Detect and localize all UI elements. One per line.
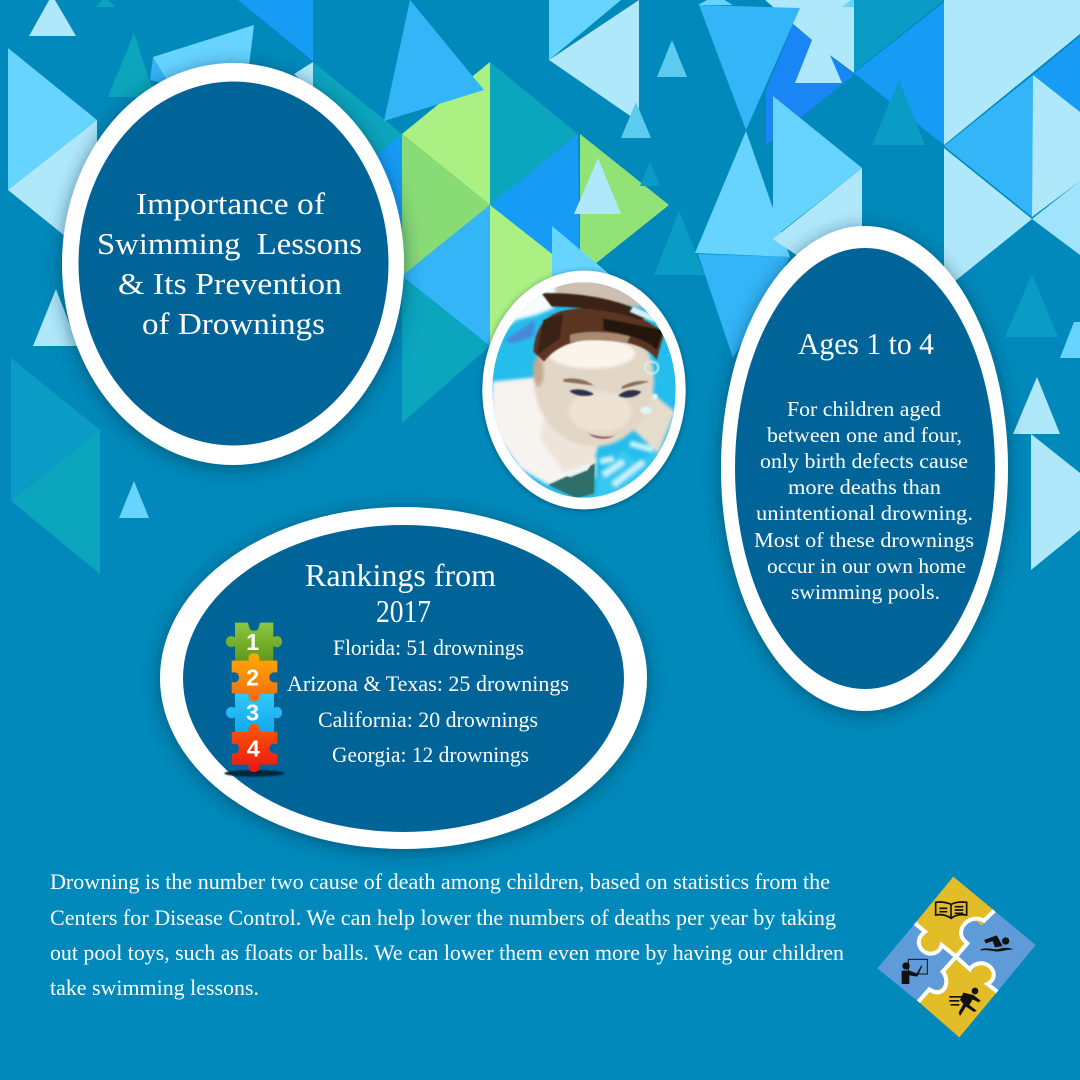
text block: ages description: Most of these drownings	[754, 528, 974, 552]
puzzle piece 2: 2	[246, 664, 259, 690]
text block: bottom paragraph: out pool toys, such as floats or balls. We can lower them even more by having our children	[50, 940, 844, 965]
text block: bottom paragraph	[50, 869, 844, 1000]
puzzle piece 3: 3	[246, 700, 259, 726]
text block: bottom paragraph: Drowning is the number two cause of death among children, based on statistics from the	[50, 869, 830, 894]
title: of Drownings	[142, 306, 325, 341]
icon: runner	[949, 988, 981, 1016]
puzzle piece 3	[226, 693, 282, 732]
text block: ages description: between one and four,	[767, 423, 962, 447]
heading: rankings from 2017: Rankings from	[305, 557, 496, 593]
text block: ages description: occur in our own home	[767, 554, 966, 578]
text block: ages description: more deaths than	[788, 475, 942, 499]
title: & Its Prevention	[118, 266, 343, 301]
title: Swimming Lessons	[97, 226, 362, 261]
title: Importance of	[136, 186, 326, 221]
icon: open book	[936, 902, 967, 918]
heading: rankings from 2017	[305, 557, 496, 629]
text block: bottom paragraph: Centers for Disease Control. We can help lower the numbers of deaths per year by taking	[50, 905, 836, 930]
list: state rankings: Arizona & Texas: 25 drownings	[287, 671, 569, 696]
icon: swimmer	[981, 935, 1013, 951]
text block: ages description: only birth defects cause	[760, 449, 968, 473]
puzzle piece 1	[226, 623, 282, 661]
text block: ages description: swimming pools.	[791, 580, 940, 604]
puzzle piece 2	[232, 653, 277, 701]
text block: bottom paragraph: take swimming lessons.	[50, 975, 259, 1000]
photo: child swimming underwater	[480, 265, 693, 515]
triangle pattern	[8, 0, 1080, 574]
panel: rankings oval	[160, 507, 647, 849]
text block: ages description: For children aged	[787, 397, 942, 421]
title	[97, 186, 362, 341]
puzzle piece 4	[232, 724, 277, 772]
list: state rankings: Georgia: 12 drownings	[332, 742, 529, 767]
puzzle piece 4: 4	[247, 736, 260, 762]
icon: puzzle diamond logo	[877, 877, 1036, 1037]
text block: ages description: unintentional drowning.	[756, 501, 973, 525]
list: state rankings	[287, 635, 569, 767]
list: state rankings: California: 20 drownings	[318, 707, 538, 732]
list: state rankings: Florida: 51 drownings	[333, 635, 524, 660]
icon: numbered puzzle stack	[224, 623, 284, 777]
icon: teacher at board	[902, 959, 927, 984]
puzzle piece 1: 1	[246, 629, 259, 655]
panel: title oval	[62, 63, 404, 465]
panel: ages 1 to 4 oval	[721, 226, 1008, 711]
heading: rankings from 2017: 2017	[376, 593, 431, 629]
text block: ages description	[754, 397, 974, 604]
heading: ages 1 to 4: Ages 1 to 4	[798, 326, 934, 361]
